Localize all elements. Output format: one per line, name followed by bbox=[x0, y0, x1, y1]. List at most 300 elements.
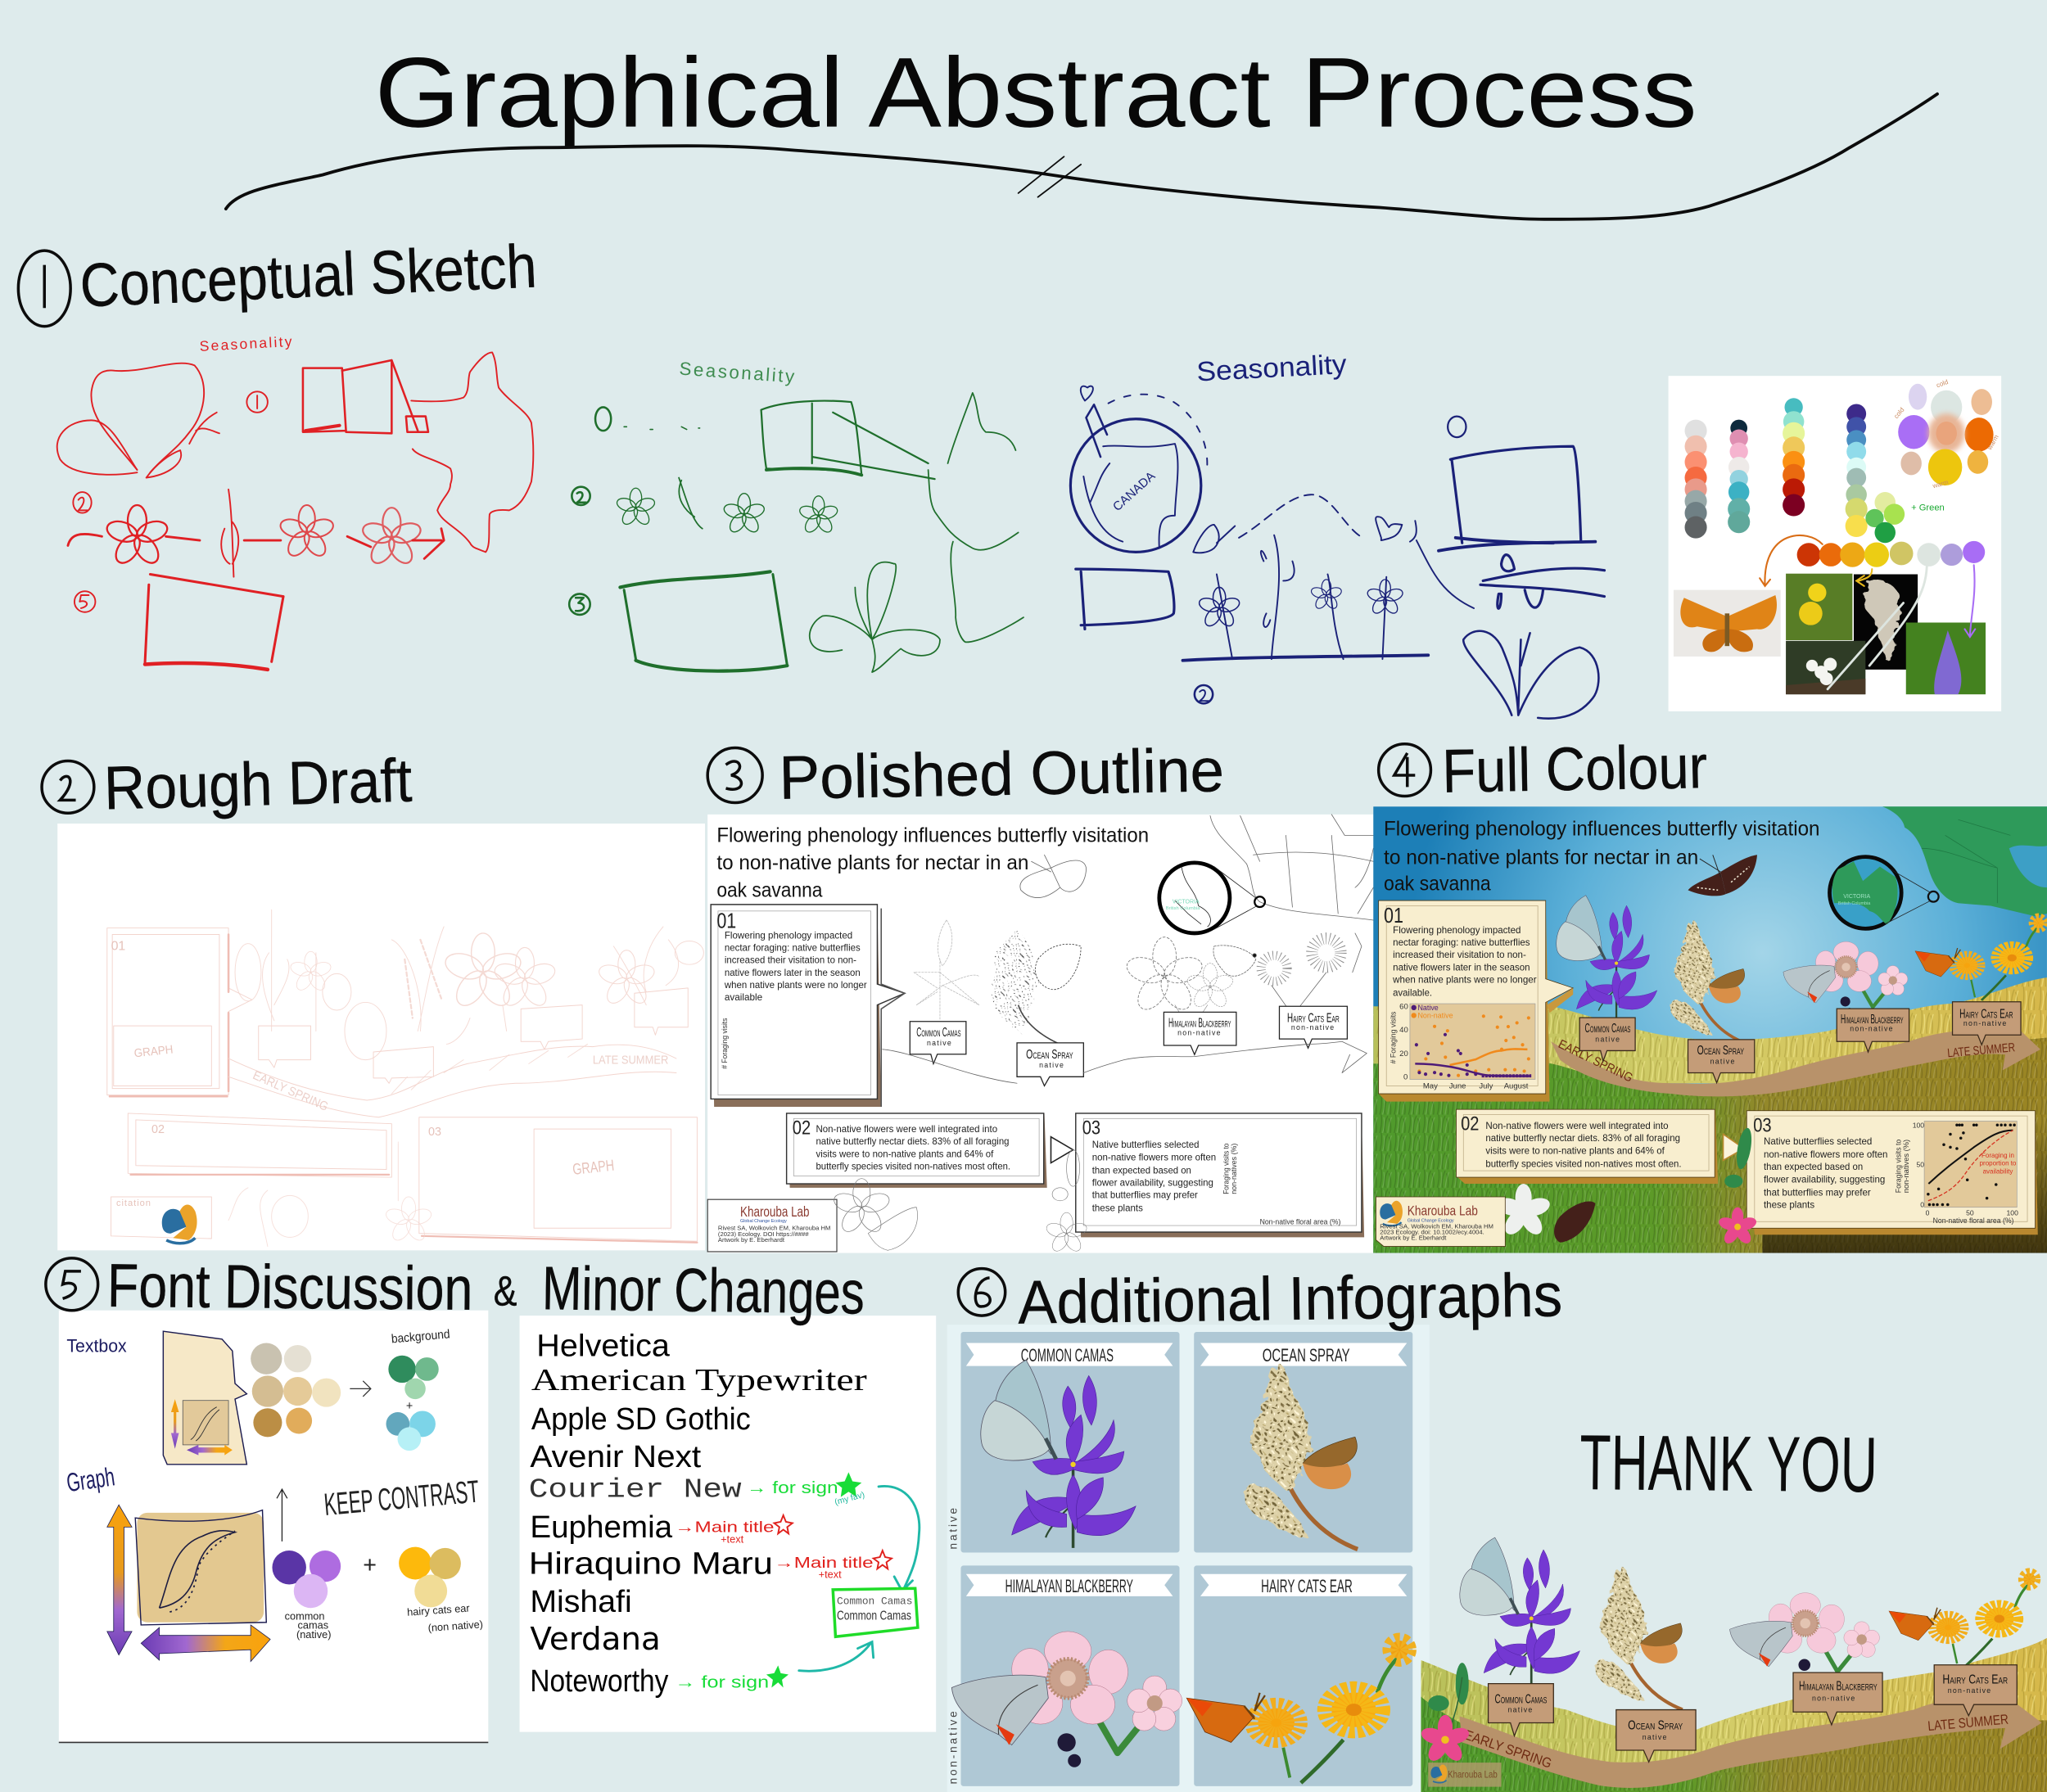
palette columns: + Green bbox=[1911, 503, 1945, 512]
chart: foraging visits over season bbox=[1389, 1002, 1535, 1091]
plant art blackberry bbox=[1783, 941, 1908, 1015]
box 03 text: Native butterflies selected bbox=[1092, 1139, 1199, 1150]
sign camas scene: Common Camas bbox=[1495, 1693, 1547, 1707]
title full colour: oak savanna bbox=[1384, 873, 1491, 895]
font list: Hiraquino Maru bbox=[529, 1546, 773, 1582]
sign camas scene bbox=[1489, 1684, 1553, 1736]
chart: foraging visits over season: May bbox=[1423, 1082, 1438, 1091]
note: noteworthy for sign: → for sign bbox=[675, 1672, 769, 1691]
flowers green bbox=[616, 478, 839, 535]
plant art cats ear bbox=[1915, 918, 2044, 1000]
box 01 text: increased their visitation to non- bbox=[725, 955, 856, 966]
draft box 01 bbox=[107, 928, 252, 1096]
season path scene: LATE SUMMER bbox=[1927, 1712, 2009, 1734]
card: hairy cats ear bbox=[1186, 1565, 1412, 1786]
sign cats ear full bbox=[1953, 1002, 2021, 1045]
flowers on ground navy bbox=[1183, 535, 1428, 703]
outline plant: camas bbox=[914, 920, 979, 1019]
box 01 bbox=[711, 905, 905, 1107]
sign camas: native bbox=[927, 1039, 952, 1047]
chart: floral area vs visits: availability bbox=[1983, 1167, 2013, 1175]
arrow full 02 to 03 bbox=[1724, 1134, 1744, 1160]
heading 3: polished outline: Polished Outline bbox=[779, 735, 1225, 812]
card: himalayan blackberry: HIMALAYAN BLACKBERRY bbox=[1005, 1576, 1133, 1596]
lab box full bbox=[1376, 1197, 1505, 1247]
box 3 navy bbox=[1439, 417, 1595, 551]
sketch 2: green concept bbox=[569, 359, 1024, 672]
box 03 text: flower availability, suggesting bbox=[1092, 1176, 1213, 1188]
draft lower plants bbox=[228, 1142, 433, 1247]
box 01 text: nectar foraging: native butterflies bbox=[725, 941, 861, 953]
title full colour: Flowering phenology influences butterfly visitation bbox=[1384, 818, 1820, 840]
map inset circle: VICTORIA bbox=[1843, 894, 1870, 900]
box 03 text: these plants bbox=[1092, 1203, 1143, 1214]
box 02 full text: butterfly species visited non-natives most often. bbox=[1485, 1158, 1682, 1169]
title: Graphical Abstract Process bbox=[375, 37, 1697, 148]
lab badge scene: Kharouba Lab bbox=[1448, 1769, 1498, 1780]
lab box outline: Kharouba Lab bbox=[740, 1203, 810, 1220]
note: hiraquino main title: →Main title bbox=[774, 1554, 874, 1571]
box 02 text: butterfly species visited non-natives most often. bbox=[816, 1161, 1010, 1172]
sign cats ear full: Hairy Cats Ear bbox=[1959, 1008, 2013, 1022]
card: hairy cats ear: HAIRY CATS EAR bbox=[1261, 1576, 1353, 1596]
lab box full: Rivest SA, Wolkovich EM, Kharouba HM bbox=[1380, 1222, 1493, 1230]
box 03 full text: Native butterflies selected bbox=[1764, 1135, 1872, 1147]
draft box 02 bbox=[128, 1113, 391, 1177]
heading 5: font discussion: Minor Changes bbox=[541, 1253, 865, 1327]
chart: floral area vs visits bbox=[1894, 1121, 2018, 1225]
box 01 full text: Flowering phenology impacted bbox=[1393, 924, 1521, 936]
reference photo: dandelion bbox=[1785, 573, 1853, 641]
box 03 full text: than expected based on bbox=[1764, 1161, 1863, 1172]
outline butterfly bbox=[1020, 855, 1087, 898]
sign spray scene: Ocean Spray bbox=[1628, 1718, 1683, 1732]
sign spray full: Ocean Spray bbox=[1697, 1044, 1744, 1058]
polished title: to non-native plants for nectar in an bbox=[716, 852, 1028, 874]
box 02 full bbox=[1457, 1109, 1718, 1184]
sign blackberry scene: non-native bbox=[1812, 1694, 1856, 1702]
font list: Avenir Next bbox=[530, 1439, 702, 1474]
box 02 text: native butterfly nectar diets. 83% of all foraging bbox=[816, 1135, 1009, 1147]
chart: foraging visits over season: Non-native bbox=[1417, 1012, 1453, 1020]
chart: floral area vs visits: 100 bbox=[2007, 1208, 2018, 1216]
textbox document icon bbox=[163, 1331, 246, 1465]
note: courier for sign: (my fav) bbox=[834, 1491, 865, 1507]
panel: polished outline bbox=[707, 815, 1373, 1254]
canada map bbox=[1882, 806, 2047, 916]
arrow 02 to 03 bbox=[1051, 1137, 1073, 1163]
chart: floral area vs visits: proportion to bbox=[1980, 1160, 2017, 1167]
card: common camas bbox=[960, 1332, 1180, 1552]
sign cats ear scene: non-native bbox=[1948, 1686, 1991, 1695]
chart: foraging visits over season: 40 bbox=[1399, 1026, 1408, 1035]
yellow swatches: hairy cats ear bbox=[407, 1601, 471, 1618]
sign cats ear: Hairy Cats Ear bbox=[1287, 1011, 1340, 1025]
season path: LATE SUMMER bbox=[1947, 1040, 2016, 1060]
sign font sample: Common Camas bbox=[837, 1595, 912, 1607]
box 03 text bbox=[1092, 1139, 1216, 1214]
outline plant: cats ear bbox=[1213, 933, 1362, 1008]
draft signs bbox=[259, 988, 688, 1083]
panel: full colour bbox=[1373, 806, 2047, 1253]
keep contrast note: KEEP CONTRAST bbox=[323, 1474, 481, 1523]
box 01: 01 bbox=[716, 910, 736, 933]
box 01 text: available bbox=[725, 991, 762, 1003]
box 01 full bbox=[1379, 901, 1573, 1102]
reference photo: camas bbox=[1906, 622, 1986, 694]
box 03: 03 bbox=[1082, 1117, 1100, 1139]
draft box 03: GRAPH bbox=[572, 1158, 615, 1179]
box 03 full: 03 bbox=[1753, 1114, 1772, 1136]
season path: EARLY SPRING bbox=[1556, 1037, 1635, 1086]
chart: floral area vs visits: Foraging in bbox=[1981, 1152, 2014, 1159]
chart: foraging visits over season: 20 bbox=[1399, 1049, 1408, 1058]
sign blackberry: Himalayan Blackberry bbox=[1168, 1017, 1231, 1031]
label: seasonality navy: Seasonality bbox=[1196, 350, 1348, 388]
box 03 full text: that butterflies may prefer bbox=[1764, 1186, 1871, 1198]
chart: foraging visits over season: Native bbox=[1417, 1004, 1439, 1012]
font list: Courier New bbox=[529, 1475, 742, 1506]
up arrow bbox=[277, 1489, 287, 1541]
background swatches: + bbox=[406, 1400, 413, 1413]
outline map inset: VICTORIA bbox=[1173, 899, 1200, 905]
sign spray full: native bbox=[1710, 1057, 1736, 1065]
box left navy bbox=[1076, 569, 1174, 629]
yellow swatches bbox=[399, 1547, 483, 1634]
box 03 full text: non-native flowers more often bbox=[1764, 1149, 1887, 1160]
draft path: EARLY SPRING bbox=[251, 1068, 330, 1114]
box 01 text: when native plants were no longer bbox=[724, 979, 867, 991]
box 01 full text: available. bbox=[1393, 986, 1432, 998]
graph label: Graph bbox=[65, 1461, 116, 1497]
sign blackberry: non-native bbox=[1177, 1028, 1222, 1036]
background label: background bbox=[391, 1327, 450, 1347]
reference photo: bramble bbox=[1786, 641, 1865, 694]
plant art spray bbox=[1670, 919, 1745, 1043]
horizontal gradient arrow bbox=[141, 1625, 270, 1662]
heading 5: font discussion: Font Discussion bbox=[107, 1251, 473, 1323]
art cats ear scene bbox=[1889, 1573, 2036, 1667]
draft box 03: 03 bbox=[428, 1126, 441, 1139]
box 03: non-natives (%) bbox=[1230, 1144, 1238, 1194]
front grass scene bbox=[1421, 1697, 2047, 1792]
note: euphemia main title: →Main title bbox=[675, 1519, 774, 1536]
chart: floral area vs visits: non-natives (%) bbox=[1902, 1140, 1910, 1193]
font list: Helvetica bbox=[536, 1328, 671, 1363]
card: ocean spray: OCEAN SPRAY bbox=[1263, 1345, 1350, 1365]
heading 6: additional infographs: Additional Infographs bbox=[1018, 1260, 1563, 1337]
full colour signs bbox=[1579, 1002, 2021, 1083]
panel: textbox and graph colours bbox=[59, 1311, 488, 1742]
note: courier for sign bbox=[747, 1472, 865, 1507]
box 01 text bbox=[724, 929, 867, 1003]
colour wheel: cold bbox=[1892, 406, 1906, 420]
box 03 full bbox=[1747, 1111, 2038, 1235]
scene: thank you landscape bbox=[1419, 1537, 2047, 1792]
purple swatches bbox=[272, 1551, 341, 1641]
sign cats ear: non-native bbox=[1291, 1023, 1335, 1031]
lab box full: Artwork by E. Eberhardt bbox=[1380, 1235, 1447, 1242]
box 01 full text: native flowers later in the season bbox=[1393, 962, 1530, 973]
sketch 1: red concept bbox=[57, 333, 533, 670]
sign blackberry full bbox=[1837, 1009, 1909, 1052]
sign camas full: native bbox=[1595, 1035, 1620, 1043]
box 02 text: Non-native flowers were well integrated into bbox=[816, 1123, 997, 1135]
box 02 full text: native butterfly nectar diets. 83% of all foraging bbox=[1485, 1132, 1680, 1144]
season path scene bbox=[1460, 1686, 2042, 1788]
draft citation bbox=[111, 1197, 211, 1239]
numbers green bbox=[569, 407, 700, 615]
lab box full: 2023 Ecology. doi: 10.1002/ecy.4004. bbox=[1380, 1228, 1484, 1235]
box 01 text: Flowering phenology impacted bbox=[725, 929, 852, 941]
textbox swatches bbox=[251, 1343, 341, 1437]
font list: Verdana bbox=[530, 1621, 661, 1658]
migration path navy bbox=[1193, 494, 1474, 608]
purple swatches: (native) bbox=[296, 1628, 331, 1641]
teal arrows bbox=[799, 1486, 920, 1671]
laptop box red bbox=[303, 360, 428, 433]
sign camas: Common Camas bbox=[916, 1026, 960, 1040]
panel: rough draft bbox=[57, 824, 705, 1250]
chart: foraging visits over season: July bbox=[1479, 1082, 1493, 1091]
purple swatches: common bbox=[285, 1610, 325, 1623]
box 02 text: visits were to non-native plants and 64% of bbox=[816, 1148, 994, 1159]
butterfly green bbox=[810, 562, 940, 672]
font list: Noteworthy bbox=[530, 1663, 669, 1699]
box 02 full text: Non-native flowers were well integrated into bbox=[1485, 1120, 1669, 1131]
box 01 full text: increased their visitation to non- bbox=[1393, 949, 1526, 960]
card: common camas: COMMON CAMAS bbox=[1021, 1345, 1114, 1365]
box 03 text: than expected based on bbox=[1092, 1164, 1191, 1176]
font list bbox=[529, 1328, 867, 1699]
side label non-native: non-native bbox=[947, 1708, 960, 1784]
sign spray scene: native bbox=[1643, 1733, 1668, 1741]
box 03 text: that butterflies may prefer bbox=[1092, 1189, 1198, 1201]
sign spray bbox=[1017, 1043, 1083, 1086]
draft box 02: 02 bbox=[151, 1123, 165, 1136]
front grass bbox=[1373, 1037, 2047, 1253]
sign camas full bbox=[1579, 1018, 1635, 1061]
box 01 full: 01 bbox=[1384, 905, 1403, 928]
label: seasonality green: Seasonality bbox=[679, 359, 798, 387]
back grass scene bbox=[1421, 1638, 2047, 1792]
note: courier for sign: → for sign bbox=[747, 1478, 838, 1497]
map inset circle: British Columbia bbox=[1838, 901, 1870, 906]
colour wheel: warm bbox=[1931, 478, 1950, 490]
lower decorations bbox=[1495, 1126, 1758, 1246]
font list: Euphemia bbox=[530, 1510, 673, 1545]
canada outline green bbox=[929, 393, 1024, 642]
box 01 full text: when native plants were no longer bbox=[1392, 974, 1537, 986]
chart: floral area vs visits: Non-native floral area (%) bbox=[1933, 1216, 2013, 1225]
lab badge scene bbox=[1428, 1763, 1502, 1787]
colour arrows bbox=[1760, 535, 1975, 689]
sign blackberry full: Himalayan Blackberry bbox=[1841, 1013, 1904, 1027]
heading 1: conceptual sketch: Conceptual Sketch bbox=[79, 231, 538, 320]
draft path: LATE SUMMER bbox=[593, 1053, 668, 1067]
butterfly navy bbox=[1463, 631, 1598, 719]
lab box outline: Global Change Ecology bbox=[740, 1219, 787, 1224]
chart: floral area vs visits: 50 bbox=[1966, 1208, 1974, 1216]
box 03: Foraging visits to bbox=[1222, 1144, 1230, 1194]
purple swatches: camas bbox=[298, 1619, 328, 1632]
reference photo: butterfly bbox=[1674, 590, 1781, 657]
sign font sample: Common Camas bbox=[837, 1609, 911, 1623]
lab box outline: (2023) Ecology. DOI https://#### bbox=[718, 1230, 809, 1238]
polished title: Flowering phenology influences butterfly visitation bbox=[716, 824, 1149, 846]
colour wheel: cold bbox=[1936, 378, 1949, 389]
outline plant: ocean spray bbox=[991, 929, 1081, 1044]
textbox label: Textbox bbox=[66, 1336, 127, 1356]
outline map inset bbox=[1159, 863, 1265, 933]
selected colour row bbox=[1797, 541, 1985, 567]
chart: foraging visits over season: 0 bbox=[1403, 1073, 1408, 1082]
outline map bbox=[1210, 815, 1373, 920]
chart: foraging visits over season: June bbox=[1449, 1082, 1466, 1091]
heading 5: font discussion: & bbox=[494, 1267, 517, 1314]
box and lines green bbox=[761, 401, 935, 479]
art blackberry scene bbox=[1730, 1593, 1879, 1681]
box 03 bbox=[1076, 1113, 1364, 1237]
right leaves navy bbox=[1480, 555, 1604, 608]
lab box outline bbox=[707, 1199, 837, 1252]
lab box outline: Rivest SA, Wolkovich EM, Kharouba HM bbox=[718, 1225, 830, 1232]
flower row red bbox=[68, 490, 444, 577]
box 03 full text: flower availability, suggesting bbox=[1764, 1173, 1885, 1185]
box 01 full text bbox=[1392, 924, 1537, 998]
box 03 full text bbox=[1764, 1135, 1887, 1211]
sign camas scene: native bbox=[1507, 1706, 1534, 1714]
outline plant: blackberry bbox=[1123, 937, 1235, 1031]
draft box 01: 01 bbox=[111, 940, 125, 954]
title full colour: to non-native plants for nectar in an bbox=[1384, 846, 1698, 869]
art spray scene bbox=[1595, 1565, 1683, 1709]
sign cats ear bbox=[1279, 1006, 1347, 1048]
chart: floral area vs visits: 0 bbox=[1920, 1201, 1924, 1209]
note: euphemia main title bbox=[675, 1515, 793, 1545]
plus sign: + bbox=[363, 1552, 377, 1578]
font list: Apple SD Gothic bbox=[531, 1402, 751, 1437]
box 03 full text: these plants bbox=[1764, 1199, 1814, 1211]
note: hiraquino main title bbox=[774, 1551, 892, 1581]
sign blackberry scene: Himalayan Blackberry bbox=[1799, 1680, 1878, 1694]
background swatches bbox=[386, 1356, 439, 1451]
sign cats ear scene bbox=[1934, 1665, 2017, 1716]
sign camas full: Common Camas bbox=[1585, 1022, 1630, 1036]
box 02 text bbox=[816, 1123, 1010, 1172]
font list: Mishafi bbox=[530, 1584, 632, 1619]
season path scene: EARLY SPRING bbox=[1462, 1727, 1554, 1772]
thank you message: THANK YOU bbox=[1579, 1419, 1878, 1509]
reference photo: ocean spray bbox=[1854, 575, 1918, 670]
box 03 text: non-native flowers more often bbox=[1092, 1151, 1216, 1162]
box 02 full text: visits were to non-native plants and 64% of bbox=[1485, 1144, 1665, 1156]
canada outline red bbox=[411, 352, 533, 552]
sketch 3: navy concept bbox=[1070, 350, 1604, 719]
arrow to background bbox=[350, 1381, 371, 1397]
lab box outline: Artwork by E. Eberhardt bbox=[718, 1236, 785, 1244]
box 02 bbox=[787, 1113, 1047, 1188]
outline map inset: British Columbia bbox=[1166, 906, 1200, 911]
colour wheel: warm bbox=[1986, 433, 2000, 452]
heading 5: font discussion bbox=[46, 1251, 865, 1327]
box 03: Non-native floral area (%) bbox=[1260, 1217, 1340, 1226]
polished title bbox=[716, 824, 1149, 901]
draft plants bbox=[235, 910, 703, 1060]
note: hiraquino main title: +text bbox=[819, 1569, 842, 1581]
box 02 full: 02 bbox=[1461, 1113, 1479, 1135]
sign font sample bbox=[833, 1588, 918, 1636]
lab box full: Kharouba Lab bbox=[1408, 1203, 1478, 1218]
art camas scene bbox=[1460, 1537, 1580, 1683]
box 01 full text: nectar foraging: native butterflies bbox=[1393, 937, 1530, 948]
back grass bbox=[1373, 977, 2047, 1083]
butterfly red bbox=[57, 363, 219, 478]
sign camas bbox=[910, 1022, 966, 1063]
sky bbox=[1373, 806, 2047, 1253]
polished title: oak savanna bbox=[716, 879, 823, 901]
lab box full: Global Change Ecology bbox=[1408, 1218, 1454, 1223]
title underline swoosh bbox=[226, 94, 1937, 219]
outline corner plants bbox=[832, 1150, 1088, 1254]
map inset circle bbox=[1829, 857, 1931, 928]
card: ocean spray bbox=[1194, 1332, 1412, 1552]
vertical gradient arrow bbox=[107, 1505, 132, 1655]
chart: floral area vs visits: Foraging visits to bbox=[1894, 1140, 1902, 1193]
polished signs bbox=[910, 1006, 1347, 1086]
title full colour bbox=[1384, 818, 1820, 895]
draft citation: citation bbox=[116, 1198, 151, 1208]
colour wheel bbox=[1892, 378, 2000, 490]
plant art camas bbox=[1557, 896, 1657, 1018]
chart: foraging visits over season: 60 bbox=[1399, 1002, 1408, 1011]
chart: foraging visits over season: # Foraging visits bbox=[1389, 1011, 1397, 1063]
draft path bbox=[228, 1044, 676, 1117]
sign spray full bbox=[1688, 1040, 1755, 1083]
side label native: native bbox=[947, 1505, 960, 1549]
box 02: 02 bbox=[793, 1117, 811, 1139]
sign blackberry scene bbox=[1793, 1672, 1882, 1725]
note: noteworthy for sign bbox=[675, 1665, 789, 1691]
panel: font candidates bbox=[520, 1316, 936, 1732]
box green bbox=[620, 571, 787, 671]
sign spray: native bbox=[1039, 1061, 1064, 1069]
box red bbox=[145, 575, 283, 670]
panel: additional infographs bbox=[947, 1325, 1430, 1792]
chart: floral area vs visits: 100 bbox=[1913, 1121, 1924, 1129]
palette columns bbox=[1685, 398, 1945, 543]
numbers red bbox=[73, 391, 268, 612]
box 01 text: native flowers later in the season bbox=[725, 967, 861, 978]
draft box 03 bbox=[419, 1117, 697, 1243]
box 02 full text bbox=[1485, 1120, 1682, 1169]
season path bbox=[1551, 1012, 2040, 1096]
yellow swatches: (non native) bbox=[427, 1618, 483, 1634]
wild rose and leaves bbox=[1419, 1663, 1471, 1764]
sign cats ear full: non-native bbox=[1963, 1019, 2008, 1027]
sign spray scene bbox=[1616, 1710, 1696, 1762]
outline season path bbox=[883, 1041, 1367, 1083]
chart: foraging visits over season: August bbox=[1504, 1082, 1529, 1091]
sign spray: Ocean Spray bbox=[1026, 1048, 1073, 1062]
sign blackberry full: non-native bbox=[1850, 1025, 1894, 1033]
heading 4: full colour: Full Colour bbox=[1442, 732, 1708, 806]
font list: American Typewriter bbox=[531, 1363, 867, 1397]
draft logo bbox=[162, 1205, 197, 1244]
card: himalayan blackberry bbox=[951, 1565, 1182, 1786]
chart: floral area vs visits: 0 bbox=[1926, 1208, 1930, 1216]
box 01: # Foraging visits bbox=[721, 1018, 729, 1069]
